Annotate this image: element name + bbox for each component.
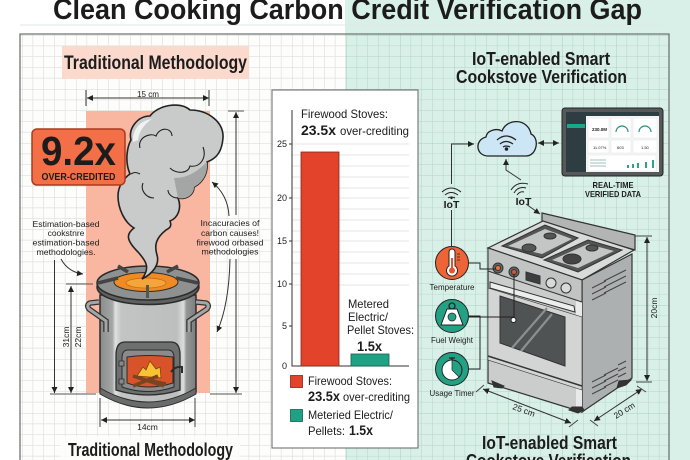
callout: 9.2x over-credited — [32, 128, 125, 185]
legend: firewood: over-crediting — [343, 390, 410, 404]
y axis: 0 — [282, 361, 287, 371]
dimension: 31cm and 22cm — [50, 260, 96, 394]
dimension: 20cm height — [635, 236, 659, 382]
text: inaccuracies note — [196, 182, 264, 332]
dashboard monitor — [562, 108, 663, 176]
y axis — [277, 110, 409, 371]
text: estimation note: Estimation-based — [32, 219, 100, 229]
label: real-time verified data: VERIFIED DATA — [585, 189, 641, 199]
label: metered electric — [347, 297, 414, 354]
y axis: 15 — [277, 236, 287, 246]
text: inaccuracies note: Incacuracies of — [200, 218, 260, 228]
panel: iot verification — [430, 48, 663, 460]
icon: usage timer sensor — [430, 352, 475, 398]
bottom heading: iot verification: IoT-enabled Smart — [482, 433, 617, 453]
legend: firewood: Firewood Stoves: — [308, 374, 392, 388]
legend: metered: 1.5x — [349, 422, 373, 438]
dimension: 25 cm depth: 25 cm — [511, 401, 536, 419]
y axis: 5 — [282, 321, 287, 331]
text: inaccuracies note: methodologies — [202, 246, 258, 256]
panel: bar chart card — [272, 90, 418, 448]
heading: iot-enabled smart cookstove verification: Cookstove Verification — [456, 66, 627, 87]
heading: traditional methodology: Traditional Methodology — [64, 53, 247, 74]
dimension: 14cm — [100, 398, 195, 432]
label: firewood stoves — [301, 107, 409, 138]
bottom heading: traditional methodology: Traditional Methodology — [68, 440, 233, 460]
y axis: 10 — [277, 279, 287, 289]
icon: smoke plume — [118, 105, 223, 279]
dimension: 20 cm width: 20 cm — [612, 400, 637, 421]
pink measurement zone — [86, 111, 210, 393]
dimension: 15 cm: 15 cm — [137, 89, 159, 99]
callout: 9.2x over-credited: OVER-CREDITED — [42, 171, 116, 183]
text: estimation note: estimation-based — [32, 238, 100, 248]
label: metered electric: Electric/ — [348, 310, 389, 324]
icon: usage timer sensor: Usage Timer — [430, 388, 475, 398]
dimension: 15 cm — [86, 89, 209, 106]
arrows and iot signals: IoT — [516, 196, 532, 208]
dimension: 31cm and 22cm: 22cm — [73, 327, 83, 347]
text: inaccuracies note: firewood orbased — [196, 238, 264, 248]
text: estimation note: methodologies. — [36, 247, 96, 257]
label: firewood stoves: 23.5x — [301, 122, 336, 138]
dimension: right height — [210, 111, 244, 394]
icon: cookstove — [88, 266, 208, 408]
icon: temperature sensor: Temperature — [430, 282, 475, 292]
y axis: 25 — [277, 139, 287, 149]
legend: firewood — [290, 374, 410, 404]
heading: traditional methodology — [62, 46, 249, 79]
callout: 9.2x over-credited: 9.2x — [41, 128, 116, 174]
y axis: 20 — [277, 193, 287, 203]
bar: metered electric — [351, 354, 389, 366]
panel: traditional methodology — [32, 46, 264, 460]
icon: fuel weight sensor: Fuel Weight — [431, 335, 474, 345]
dimension: 20cm height: 20cm — [649, 298, 659, 318]
heading: iot-enabled smart cookstove verification — [456, 48, 627, 87]
arrow: cloud to dashboard — [538, 142, 559, 144]
text: inaccuracies note: carbon causes! — [201, 228, 259, 238]
dashboard monitor: 11.07% — [593, 145, 607, 150]
label: real-time verified data — [585, 180, 641, 199]
gridlines — [292, 144, 409, 285]
legend: metered: Pellets: — [308, 424, 345, 438]
arrows and iot signals — [442, 144, 540, 246]
dimension: 31cm and 22cm: 31cm — [61, 327, 71, 347]
label: firewood stoves: Firewood Stoves: — [301, 107, 388, 121]
heading: iot-enabled smart cookstove verification: IoT-enabled Smart — [472, 48, 610, 69]
label: real-time verified data: REAL-TIME — [592, 180, 634, 190]
dashboard monitor: 1.50 — [641, 145, 650, 150]
legend: metered — [290, 408, 394, 438]
range sensor leads — [469, 263, 516, 369]
label: metered electric: Pellet Stoves: — [347, 323, 414, 337]
legend: metered: Meteried Electric/ — [308, 408, 394, 422]
label: firewood stoves: over-crediting — [340, 124, 409, 138]
dashboard monitor: 230.0M — [592, 127, 607, 132]
label: metered electric: Metered — [348, 297, 389, 311]
text: estimation note — [32, 219, 100, 274]
icon: fuel weight sensor — [431, 300, 474, 345]
bottom heading: traditional methodology — [60, 436, 240, 460]
bar: firewood stoves — [301, 152, 339, 366]
legend: firewood: 23.5x — [308, 388, 340, 404]
dashboard monitor: 603 — [617, 145, 624, 150]
dimension: 25 cm depth — [476, 385, 578, 427]
icon: gas range with oven — [488, 213, 635, 413]
dimension: 20 cm width — [590, 386, 646, 426]
icon: temperature sensor — [430, 246, 475, 292]
arrows and iot signals: IoT — [444, 199, 460, 211]
icon: cloud — [478, 122, 536, 156]
text: estimation note: cookstnre — [48, 228, 85, 238]
dimension: 14cm: 14cm — [137, 422, 158, 432]
label: metered electric: 1.5x — [357, 338, 382, 354]
bottom heading: iot verification — [466, 433, 631, 460]
